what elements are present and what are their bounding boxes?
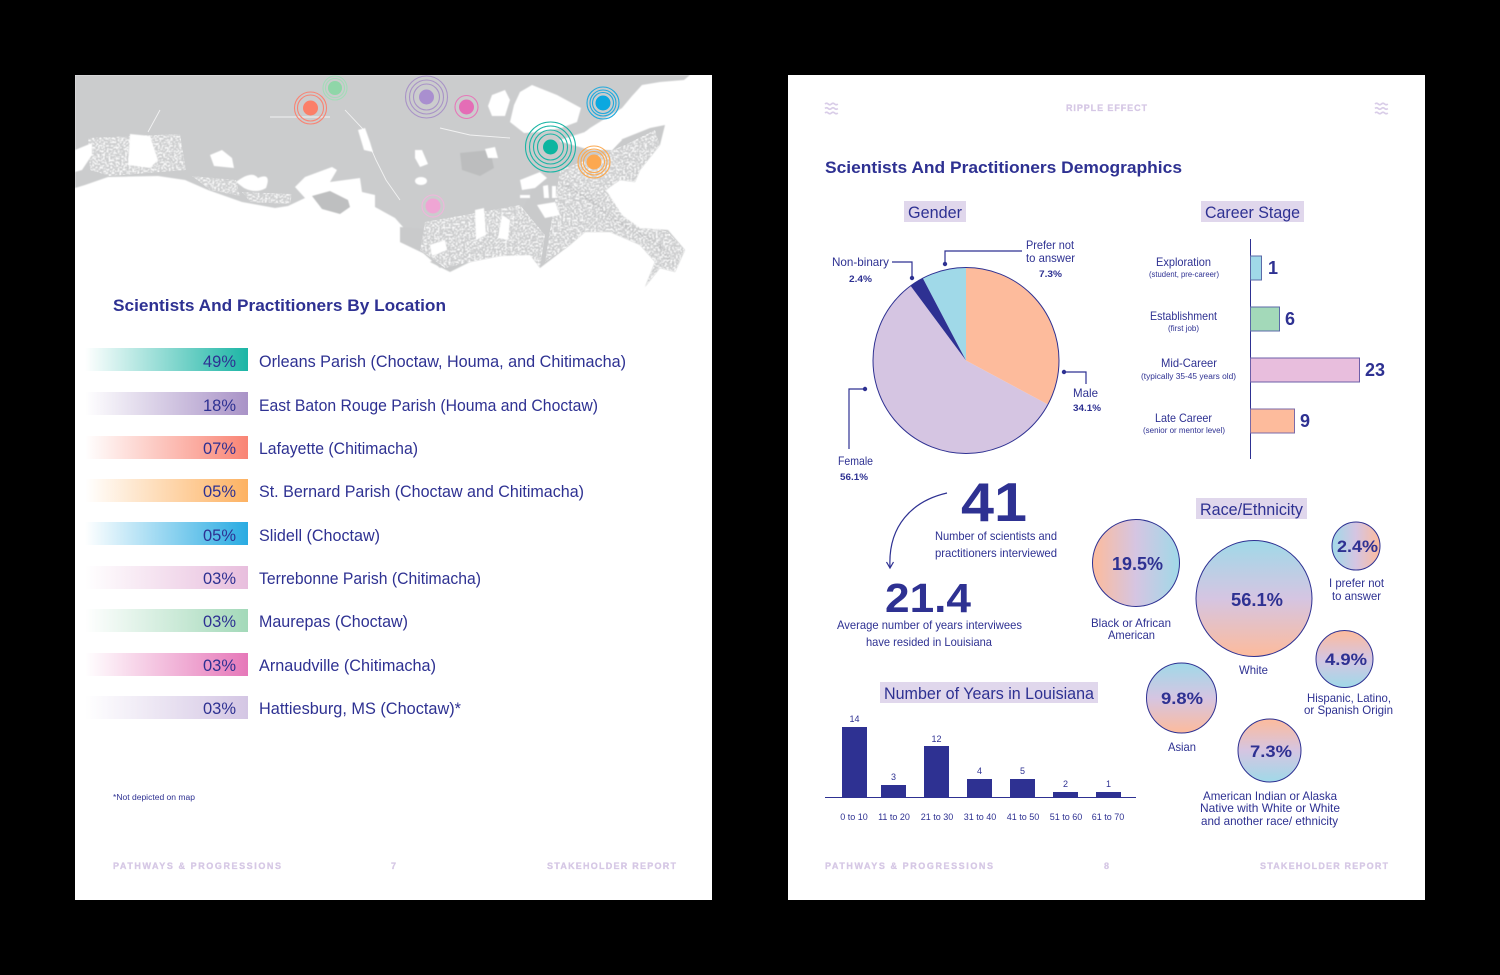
- callout: male: [1062, 370, 1101, 413]
- row: Maurepas: [85, 609, 408, 632]
- bubble: Asian: [1146, 663, 1216, 754]
- axis labels: 51 to 60: [1050, 812, 1082, 822]
- panel: left page: [75, 75, 712, 900]
- row: Terrebonne: 03%: [203, 569, 236, 588]
- lakes and bays: [75, 85, 622, 256]
- race tag: Race/Ethnicity: [1200, 501, 1304, 519]
- row: Lafayette: [85, 436, 418, 459]
- callout: female: [838, 387, 873, 482]
- bubble: Hispanic: or Spanish Origin: [1304, 703, 1393, 717]
- bubble: Black or African American: 19.5%: [1112, 554, 1163, 574]
- callout: prefer not to answer: to answer: [1026, 251, 1075, 265]
- bubble: Black or African American: [1091, 520, 1180, 642]
- bar values: 1: [1106, 779, 1111, 789]
- footer: right page: [825, 861, 1388, 871]
- years tag: Number of Years in Louisiana: [884, 685, 1095, 703]
- bar: establishment: 6: [1285, 309, 1295, 329]
- callout: non-binary: Non-binary: [832, 255, 889, 269]
- footer: right page: PATHWAYS & PROGRESSIONS: [825, 861, 993, 871]
- race and ethnicity section: [1091, 498, 1393, 828]
- location list: [85, 348, 626, 719]
- dark patch: [460, 150, 494, 176]
- bubble: Hispanic: 4.9%: [1325, 650, 1367, 669]
- row: Arnaudville: Arnaudville (Chitimacha): [259, 656, 436, 675]
- land mass: [75, 75, 690, 287]
- axis labels: [840, 812, 1124, 822]
- row: Terrebonne: Terrebonne Parish (Chitimacha): [259, 569, 481, 588]
- row: East Baton Rouge: [85, 392, 598, 415]
- white river traces: [148, 110, 510, 200]
- row: Orleans: [85, 348, 626, 371]
- career axis: [1250, 239, 1252, 459]
- bubble: American Indian or Alaska Native: [1200, 719, 1340, 828]
- speckled wetlands: [88, 130, 685, 287]
- bubble: American Indian or Alaska Native: Native with White or White: [1200, 801, 1340, 815]
- career stage section: [1141, 201, 1385, 459]
- bar: late career: (senior or mentor level): [1143, 426, 1225, 435]
- callout: prefer not to answer: [943, 238, 1075, 279]
- bubble: White: [1196, 540, 1312, 677]
- ripple: light pink: [422, 195, 444, 217]
- row: East Baton Rouge: East Baton Rouge Parish (Houma and Choctaw): [259, 396, 598, 415]
- row: Orleans: Orleans Parish (Choctaw, Houma, and Chitimacha): [259, 352, 626, 371]
- key stat: 41 interviewed: [935, 471, 1057, 560]
- map of southern Louisiana with ripple markers: [75, 75, 690, 287]
- bubble: prefer not to answer: [1329, 522, 1385, 603]
- callout: prefer not to answer: 7.3%: [1039, 269, 1062, 279]
- row: St. Bernard: [85, 479, 584, 502]
- bubble: Black or African American: Black or African: [1091, 616, 1171, 630]
- callout: male: 34.1%: [1073, 403, 1101, 413]
- panel: right page: [788, 75, 1425, 900]
- bar: mid-career: 23: [1365, 360, 1385, 380]
- ripple: green: [323, 76, 347, 100]
- bar values: 3: [891, 772, 896, 782]
- ripple: coral: [294, 92, 326, 124]
- callout: non-binary: [832, 255, 914, 284]
- bar: mid-career: [1141, 356, 1385, 382]
- bubble: American Indian or Alaska Native: 7.3%: [1250, 742, 1292, 761]
- row: Arnaudville: 03%: [203, 656, 236, 675]
- axis labels: 11 to 20: [878, 812, 910, 822]
- axis labels: 0 to 10: [840, 812, 868, 822]
- pie chart: [873, 267, 1059, 454]
- bubble: prefer not to answer: to answer: [1332, 589, 1381, 603]
- bar: late career: 9: [1300, 411, 1310, 431]
- bubble: White: White: [1239, 663, 1268, 677]
- row: Maurepas: Maurepas (Choctaw): [259, 612, 408, 631]
- row: Hattiesburg: Hattiesburg, MS (Choctaw)*: [259, 699, 461, 718]
- key stat: 21.4 years: 21.4: [885, 575, 971, 621]
- delta marsh: [430, 125, 685, 287]
- bubble: Hispanic: [1304, 630, 1393, 717]
- bubble: prefer not to answer: 2.4%: [1337, 537, 1378, 556]
- key stat: 21.4 years: [837, 575, 1022, 649]
- bar values: 12: [931, 734, 942, 744]
- bubble: Asian: 9.8%: [1161, 689, 1203, 708]
- bar values: 14: [849, 714, 860, 724]
- bubble: American Indian or Alaska Native: and another race/ ethnicity: [1201, 814, 1338, 828]
- icon: waves right: [1375, 103, 1388, 114]
- bar: mid-career: Mid-Career: [1161, 356, 1217, 370]
- bar chart: [825, 714, 1136, 822]
- callout: female: 56.1%: [840, 472, 868, 482]
- key stat: 41 interviewed: Number of scientists and: [935, 529, 1057, 543]
- row: Terrebonne: [85, 566, 481, 589]
- ripple: orange: [578, 146, 610, 178]
- row: St. Bernard: St. Bernard Parish (Choctaw and Chitimacha): [259, 482, 584, 501]
- barrier marsh island: [312, 191, 350, 214]
- row: Lafayette: 07%: [203, 439, 236, 458]
- career tag: Career Stage: [1205, 204, 1300, 222]
- key stat: 41 interviewed: 41: [961, 471, 1027, 533]
- bar values: 5: [1020, 766, 1025, 776]
- bar: exploration: [1149, 255, 1278, 280]
- bubble: prefer not to answer: I prefer not: [1329, 576, 1385, 590]
- axis labels: 41 to 50: [1007, 812, 1039, 822]
- footer: left page: STAKEHOLDER REPORT: [547, 861, 676, 871]
- key stat: 41 interviewed: practitioners interviewed: [935, 546, 1057, 560]
- footer: left page: 7: [391, 861, 396, 871]
- ripple: magenta: [455, 96, 478, 118]
- bubble: White: 56.1%: [1231, 590, 1283, 610]
- ripple: purple: [406, 76, 448, 118]
- heading: demographics: Scientists And Practitioners Demographics: [825, 159, 1182, 177]
- bubble: Hispanic: Hispanic, Latino,: [1307, 691, 1391, 705]
- bubble: American Indian or Alaska Native: American Indian or Alaska: [1203, 789, 1337, 803]
- row: Maurepas: 03%: [203, 612, 236, 631]
- footer: right page: STAKEHOLDER REPORT: [1260, 861, 1388, 871]
- key stat: 21.4 years: Average number of years interviwees: [837, 618, 1022, 632]
- bar values: 4: [977, 766, 982, 776]
- footer: right page: 8: [1104, 861, 1109, 871]
- bar: exploration: (student, pre-career): [1149, 270, 1219, 279]
- row: East Baton Rouge: 18%: [203, 396, 236, 415]
- bar: mid-career: (typically 35-45 years old): [1141, 372, 1236, 381]
- row: Slidell: 05%: [203, 526, 236, 545]
- south marsh band: [400, 226, 404, 241]
- gender tag: Gender: [908, 204, 962, 222]
- axis labels: 61 to 70: [1092, 812, 1124, 822]
- bubble: Black or African American: American: [1108, 628, 1155, 642]
- icon: waves left: [825, 103, 838, 114]
- row: Slidell: Slidell (Choctaw): [259, 526, 380, 545]
- bar values: [849, 714, 1111, 789]
- gender section: [832, 201, 1101, 482]
- bar: establishment: [1150, 307, 1295, 333]
- footer: left page: [113, 861, 676, 871]
- arrow: curved down: [886, 493, 947, 568]
- row: Lafayette: Lafayette (Chitimacha): [259, 439, 418, 458]
- row: Orleans: 49%: [203, 352, 236, 371]
- row: Hattiesburg: 03%: [203, 699, 236, 718]
- bar values: 2: [1063, 779, 1068, 789]
- bar: establishment: (first job): [1168, 324, 1199, 333]
- heading: by location: Scientists And Practitioners By Location: [113, 297, 446, 315]
- bar: late career: Late Career: [1155, 411, 1212, 425]
- header label: RIPPLE EFFECT: [1066, 103, 1148, 113]
- callout: male: Male: [1073, 386, 1098, 400]
- bar: exploration: 1: [1268, 258, 1278, 278]
- key stat: 21.4 years: have resided in Louisiana: [866, 635, 992, 649]
- callout: non-binary: 2.4%: [849, 274, 872, 284]
- bar: establishment: Establishment: [1150, 309, 1218, 323]
- row: St. Bernard: 05%: [203, 482, 236, 501]
- axis labels: 31 to 40: [964, 812, 996, 822]
- ripple: blue: [587, 87, 619, 119]
- ripple: teal: [526, 122, 576, 172]
- bar: exploration: Exploration: [1156, 255, 1211, 269]
- row: Hattiesburg: [85, 696, 461, 719]
- row: Arnaudville: [85, 653, 436, 676]
- footer: left page: PATHWAYS & PROGRESSIONS: [113, 861, 281, 871]
- bar: late career: [1143, 409, 1310, 435]
- axis labels: 21 to 30: [921, 812, 953, 822]
- bubble: Asian: Asian: [1168, 740, 1196, 754]
- row: Slidell: [85, 522, 380, 545]
- callout: prefer not to answer: Prefer not: [1026, 238, 1075, 252]
- footnote: *Not depicted on map: [113, 793, 196, 802]
- callout: female: Female: [838, 454, 873, 468]
- years in Louisiana section: [825, 682, 1136, 822]
- river: [566, 186, 672, 264]
